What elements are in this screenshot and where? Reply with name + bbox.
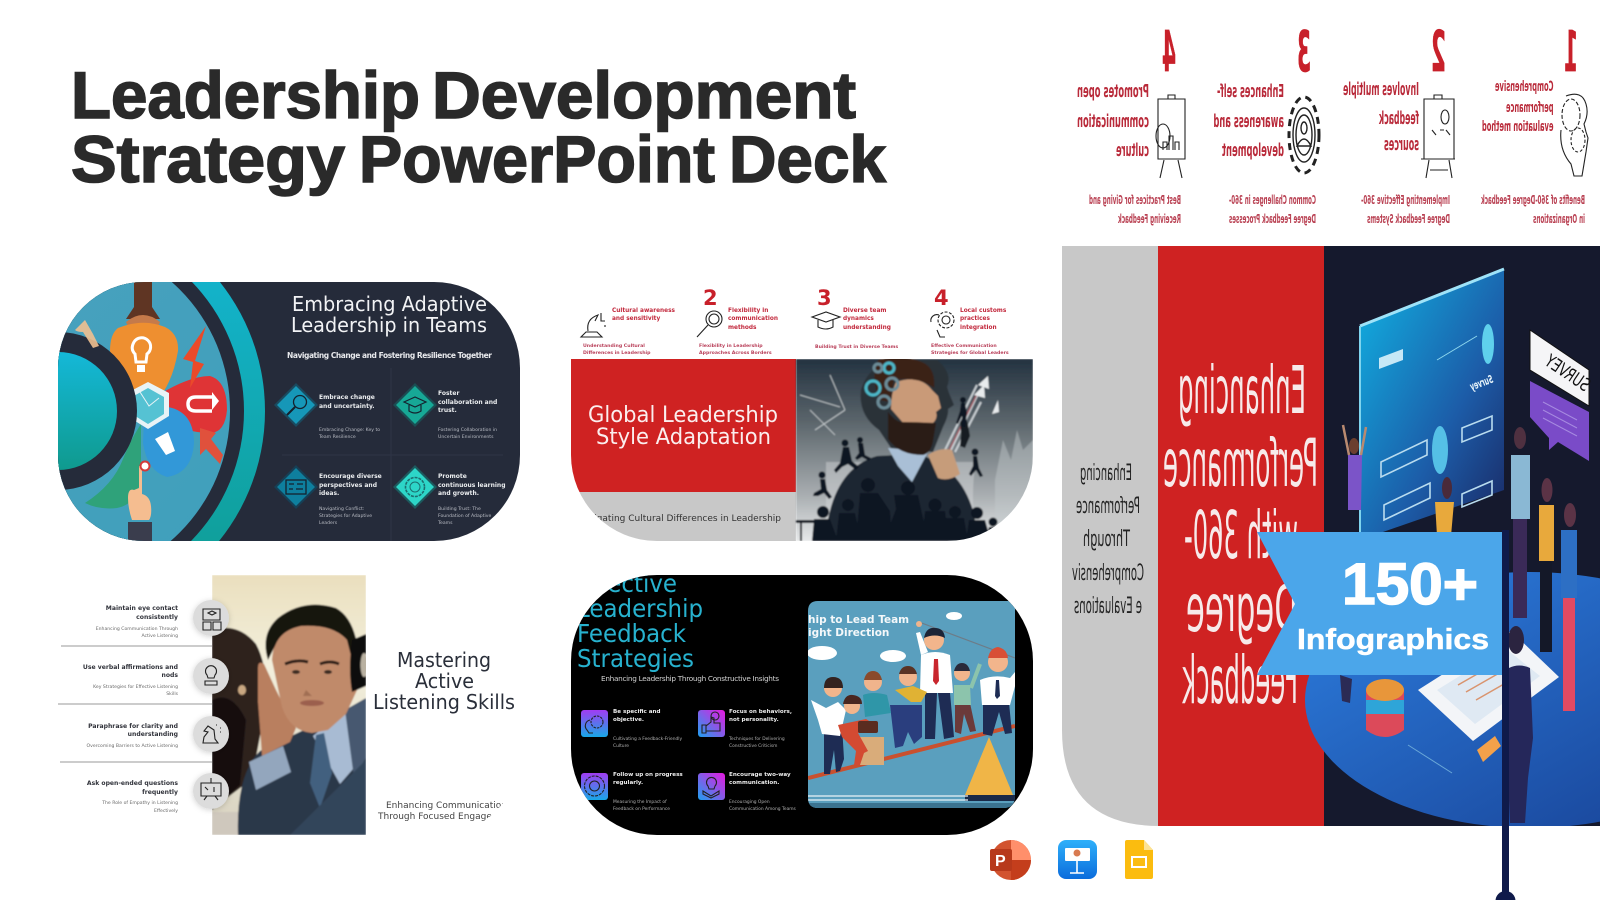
header list: global leadership points: 3 — [817, 286, 832, 310]
list: listening tips: Skills — [166, 691, 179, 697]
header list: mirrored points: evaluation method — [1482, 119, 1554, 135]
header list: mirrored points: in Organizations — [1533, 212, 1585, 226]
panel: active listening — [58, 575, 516, 835]
header list: global leadership points: 4 — [934, 286, 949, 310]
slide heading — [588, 403, 778, 450]
panel: 360 degree feedback mirrored slide — [1062, 20, 1600, 900]
item: encourage diverse: Navigating Conflict: — [319, 506, 365, 512]
panel: global leadership — [571, 286, 1033, 560]
list: listening tips: The Role of Empathy in Listening — [101, 800, 178, 806]
item: foster collaboration: trust. — [438, 407, 457, 414]
header list: mirrored points: Common Challenges in 360- — [1229, 193, 1316, 207]
list: listening tips: Overcoming Barriers to Active Listening — [87, 743, 178, 749]
item: promote learning: and growth. — [438, 490, 479, 497]
slide body: Performance — [1163, 425, 1318, 502]
item: two-way communication: Encouraging Open — [729, 799, 770, 805]
list: listening tips: frequently — [142, 789, 178, 796]
item: encourage diverse — [274, 465, 382, 526]
item: focus on behaviors: Focus on behaviors, — [729, 709, 792, 715]
header list: global leadership points: 2 — [703, 286, 718, 310]
item: promote learning: Teams — [437, 520, 453, 526]
item: two-way communication — [698, 772, 797, 812]
list: listening tips: Active Listening — [141, 633, 178, 639]
item: foster collaboration: collaboration and — [438, 399, 497, 406]
header list: mirrored points: Implementing Effective 360- — [1361, 193, 1450, 207]
header list: mirrored points: development — [1222, 140, 1284, 161]
item: focus on behaviors: Techniques for Delivering — [728, 736, 785, 742]
subtitle: Through Focused Engagement — [377, 812, 516, 822]
list: listening tips: Enhancing Communication Through — [96, 626, 178, 632]
item: two-way communication: communication. — [729, 780, 779, 786]
icons: mirrored line icons — [1156, 94, 1588, 178]
pole — [1496, 530, 1516, 900]
header list: mirrored points: 1 — [1564, 20, 1578, 85]
header list: mirrored points: sources — [1384, 134, 1419, 155]
header list: mirrored points: performance — [1506, 100, 1554, 116]
item: be specific: Cultivating a Feedback-Friendly — [613, 736, 683, 742]
item: embrace change: Embrace change — [319, 394, 375, 401]
header list: mirrored points: Receiving Feedback — [1118, 212, 1181, 226]
title: Development — [432, 58, 856, 132]
item: follow up: Feedback on Performance — [613, 806, 670, 812]
header list: mirrored points: Enhances self- — [1217, 81, 1284, 102]
header list: mirrored points: 2 — [1431, 20, 1446, 85]
heading: Leadership — [577, 594, 703, 623]
item: encourage diverse: perspectives and — [319, 482, 377, 489]
header list: mirrored points: awareness and — [1213, 111, 1284, 132]
list: listening tips: Maintain eye contact — [106, 605, 178, 612]
subtitle: Enhancing Communication — [386, 801, 507, 811]
mirrored subtitle: Through — [1083, 527, 1131, 552]
item: be specific — [581, 709, 683, 749]
item: follow up: Follow up on progress — [613, 772, 683, 778]
subtitle — [378, 801, 503, 821]
slide heading: Style Adaptation — [596, 425, 771, 450]
list: listening tips: Ask open-ended questions — [87, 780, 178, 787]
item: be specific: objective. — [613, 717, 644, 723]
item: be specific: Be specific and — [613, 709, 661, 715]
item: promote learning — [393, 465, 506, 526]
screen label: Survey: Survey — [1468, 373, 1495, 393]
header list: mirrored points: Degree Feedback Systems — [1367, 212, 1450, 226]
list: listening tips: Paraphrase for clarity and — [88, 723, 178, 730]
icon: PowerPoint: P — [995, 853, 1006, 870]
item: encourage diverse: ideas. — [319, 490, 339, 497]
illustration: hands and petals wheel — [58, 282, 265, 541]
header list: global leadership points — [581, 286, 1009, 356]
header list: mirrored points: 3 — [1297, 20, 1311, 85]
heading: Strategies — [577, 644, 694, 673]
item: embrace change: and uncertainty. — [319, 403, 375, 410]
header list: global leadership points: understanding — [843, 325, 891, 331]
item: two-way communication: Encourage two-way — [729, 772, 791, 778]
item: embrace change: Team Resilience — [318, 434, 356, 440]
panel: 360 degree feedback mirrored slide: Promotes open — [1077, 81, 1149, 102]
heading: Effective — [577, 569, 677, 598]
item: promote learning: Promote — [438, 473, 467, 480]
item: promote learning: continuous learning — [438, 482, 506, 489]
photo: bearded leader — [796, 357, 1033, 560]
item: promote learning: Building Trust: The — [438, 506, 481, 512]
title: Leadership — [71, 58, 420, 132]
slide body: with 360- — [1184, 497, 1298, 574]
illustration: team on a seesaw — [807, 601, 1018, 808]
item: foster collaboration: Uncertain Environments — [438, 434, 494, 440]
item: focus on behaviors: Constructive Criticism — [729, 743, 777, 749]
slide body: e Evaluations — [1074, 594, 1142, 619]
header list: global leadership points: Strategies for Global Leaders — [931, 350, 1009, 356]
slide body: Performance — [1076, 494, 1140, 519]
slide body: Enhancing — [1178, 352, 1306, 429]
item: follow up — [581, 772, 683, 812]
list: listening tips: Effectively — [154, 808, 178, 814]
photo: man with headphones — [212, 575, 368, 835]
banner: 150+ infographics: 150+ — [1342, 552, 1478, 617]
heading — [291, 292, 487, 337]
header list: global leadership points: practices — [960, 316, 990, 322]
header list: mirrored points: Benefits of 360-Degree Feedback — [1481, 193, 1585, 207]
panel: feedback strategies — [571, 569, 1033, 835]
heading: Listening Skills — [373, 690, 515, 714]
header list: global leadership points: Diverse team — [843, 308, 886, 314]
item: foster collaboration: Foster — [438, 390, 459, 397]
illustration: team on a seesaw: ight Direction — [808, 627, 889, 639]
item: focus on behaviors — [698, 709, 792, 749]
item: promote learning: Foundation of Adaptive — [438, 513, 491, 519]
panel: 360 degree feedback mirrored slide: communication — [1077, 111, 1149, 132]
header list: global leadership points: communication — [728, 316, 778, 322]
banner: 150+ infographics: Infographics — [1297, 624, 1489, 656]
icon: PowerPoint — [990, 840, 1031, 880]
item: foster collaboration: Fostering Collaboration in — [438, 427, 497, 433]
slide body — [1062, 246, 1600, 828]
slide body: Feedback — [1182, 642, 1298, 719]
icon: Keynote — [1058, 840, 1097, 879]
heading: Feedback — [577, 619, 686, 648]
list: listening tips: consistently — [136, 614, 178, 621]
title — [71, 58, 886, 196]
title: Deck — [729, 122, 886, 196]
heading — [373, 648, 515, 714]
header list: global leadership points: methods — [728, 325, 757, 331]
icon: Google Slides — [1125, 840, 1153, 879]
header list: mirrored points: Involves multiple — [1343, 79, 1419, 100]
illustration: team on a seesaw: hip to Lead Team — [808, 614, 909, 626]
item: embrace change — [274, 383, 380, 440]
item: foster collaboration — [393, 383, 497, 440]
header list: global leadership points: integration — [960, 325, 997, 331]
mirrored heading: Degree — [1186, 570, 1298, 647]
item: two-way communication: Communication Among Teams — [729, 806, 797, 812]
item: follow up: regularly. — [613, 780, 643, 786]
illustration: survey team — [1305, 269, 1600, 828]
subtitle: Enhancing Leadership Through Constructive Insights — [601, 674, 779, 683]
title: Strategy — [71, 122, 345, 196]
list: listening tips: Use verbal affirmations and — [83, 664, 178, 671]
banner: 150+ infographics — [1257, 532, 1502, 675]
header list: global leadership points: and sensitivity — [612, 316, 660, 322]
header list: global leadership points: Differences in Leadership — [583, 350, 651, 356]
list: listening tips: nods — [161, 672, 178, 679]
header list: mirrored points: Best Practices for Giving and — [1089, 193, 1181, 207]
item: encourage diverse: Encourage diverse — [319, 473, 382, 480]
item: focus on behaviors: not personality. — [729, 717, 779, 723]
header list: mirrored points: culture — [1116, 140, 1149, 161]
list: listening tips — [58, 600, 229, 814]
item: encourage diverse: Strategies for Adaptive — [319, 513, 372, 519]
header list: global leadership points: Flexibility in — [728, 308, 768, 314]
sign label: SURVEY: SURVEY — [1540, 350, 1594, 396]
header list: mirrored points: feedback — [1379, 108, 1419, 129]
mirrored heading — [1163, 352, 1318, 719]
heading: Active — [415, 669, 474, 693]
list: listening tips: understanding — [128, 731, 178, 738]
heading — [577, 569, 703, 673]
header list: global leadership points: Cultural awareness — [612, 308, 676, 314]
header list: global leadership points: Effective Communication — [931, 343, 997, 349]
header list: mirrored points: Degree Feedback Processes — [1229, 212, 1316, 226]
title: PowerPoint — [359, 122, 715, 196]
header list: global leadership points: Building Trust in Diverse Teams — [815, 344, 898, 350]
mirrored subtitle: Enhancing — [1080, 461, 1132, 486]
item: be specific: Culture — [613, 743, 629, 749]
item: follow up: Measuring the Impact of — [613, 799, 667, 805]
heading: Mastering — [397, 648, 491, 672]
slide subtitle: Navigating Cultural Differences in Leadership — [577, 514, 781, 524]
slide body: Comprehensiv — [1072, 561, 1144, 586]
header list: global leadership points: Flexibility in Leadership — [699, 343, 763, 349]
item: encourage diverse: Leaders — [319, 520, 338, 526]
header list: mirrored points — [1077, 20, 1588, 226]
header list: global leadership points: Local customs — [960, 308, 1007, 314]
main slide — [571, 359, 1033, 541]
header list: mirrored points: Comprehensive — [1495, 79, 1554, 95]
header list: mirrored points: 4 — [1162, 20, 1176, 85]
item: embrace change: Embracing Change: Key to — [319, 427, 380, 433]
subtitle: Navigating Change and Fostering Resilience Together — [287, 351, 492, 360]
header list: global leadership points: dynamics — [843, 316, 874, 322]
list: listening tips: Key Strategies for Effective Listening — [93, 684, 178, 690]
heading: Leadership in Teams — [291, 313, 487, 337]
header list: global leadership points: Approaches Across Borders — [699, 350, 772, 356]
slide heading: Global Leadership — [588, 403, 778, 428]
heading: Embracing Adaptive — [292, 292, 487, 316]
header list: global leadership points: Understanding Cultural — [583, 343, 645, 349]
panel: embracing adaptive leadership — [58, 282, 520, 541]
mirrored subtitle — [1072, 461, 1144, 619]
